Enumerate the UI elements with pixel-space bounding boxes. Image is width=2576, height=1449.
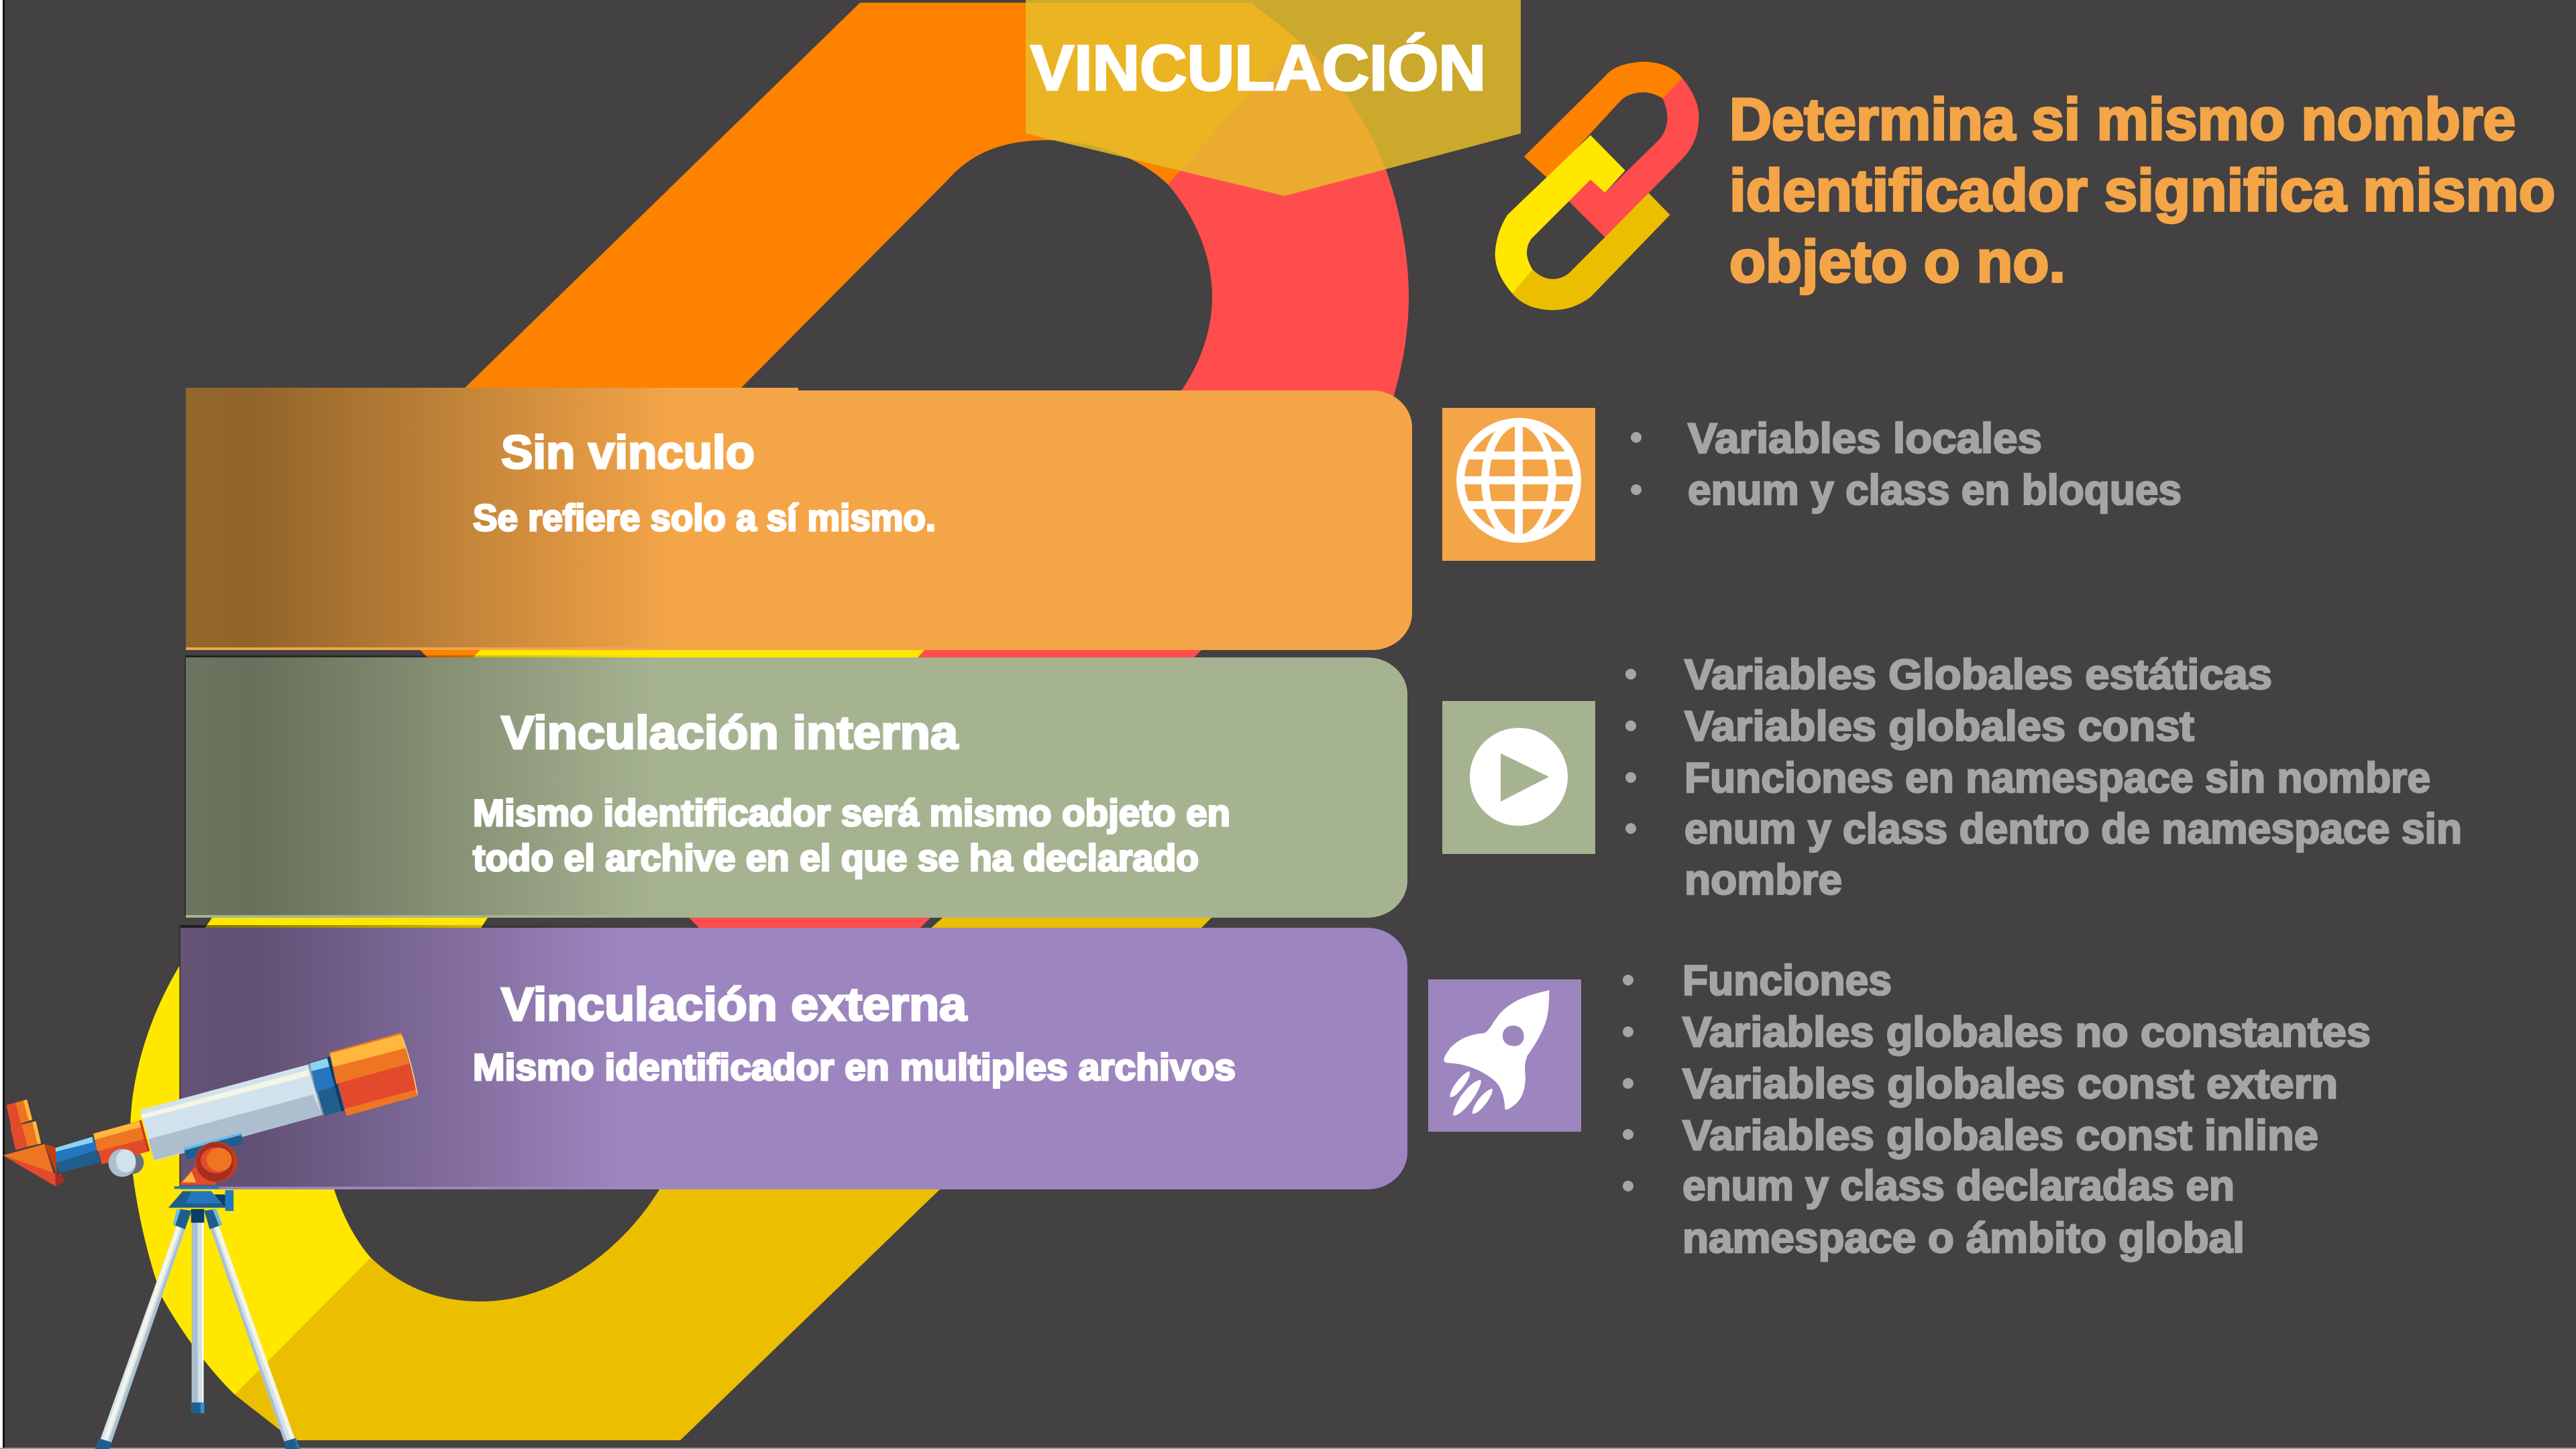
telescope body <box>49 1032 418 1177</box>
telescope mount <box>179 1132 243 1185</box>
icon: globe <box>1442 408 1595 561</box>
list: externa: namespace o ámbito global <box>1682 1215 2245 1262</box>
heading text: objeto o no. <box>1729 228 2065 294</box>
panel body: interna: todo el archive en el que se ha declarado <box>473 837 1199 879</box>
panel heading: sin vinculo: Sin vinculo <box>501 426 755 478</box>
list: interna: enum y class dentro de namespace sin <box>1684 806 2462 853</box>
list: interna: Funciones en namespace sin nombre <box>1684 755 2430 802</box>
panel body: interna: Mismo identificador será mismo objeto en <box>473 792 1230 834</box>
telescope base <box>168 1186 233 1229</box>
list: externa: Variables globales const extern <box>1682 1061 2338 1108</box>
panel heading: externa: Vinculación externa <box>501 978 967 1030</box>
icon: play <box>1442 701 1595 854</box>
illustration: telescope <box>3 1032 418 1449</box>
icon: chain link <box>1495 62 1699 310</box>
list: sin vinculo <box>1631 415 2182 514</box>
icon: rocket <box>1428 979 1581 1132</box>
list: externa <box>1623 957 2371 1262</box>
telescope eyepiece <box>3 1099 64 1186</box>
list: sin vinculo: enum y class en bloques <box>1688 467 2182 514</box>
panel: vinculacion interna <box>185 655 1407 918</box>
panel: vinculacion externa <box>180 925 1407 1189</box>
list: interna <box>1625 651 2462 904</box>
list: externa: enum y class declaradas en <box>1682 1163 2235 1210</box>
telescope legs <box>95 1222 300 1449</box>
list: interna: Variables Globales estáticas <box>1684 651 2272 698</box>
panel: sin vinculo <box>186 388 1412 650</box>
heading text: Determina si mismo nombre <box>1729 86 2516 152</box>
panel body: sin vinculo: Se refiere solo a sí mismo. <box>473 496 936 539</box>
panel heading: interna: Vinculación interna <box>501 706 959 759</box>
panel body: externa: Mismo identificador en multiples archivos <box>473 1046 1236 1088</box>
list: interna: nombre <box>1684 857 1842 904</box>
title banner <box>1026 0 1521 196</box>
list: externa: Variables globales no constantes <box>1682 1009 2371 1056</box>
title text: VINCULACIÓN <box>1030 32 1486 104</box>
list: externa: Funciones <box>1682 957 1892 1004</box>
list: sin vinculo: Variables locales <box>1688 415 2042 462</box>
heading text <box>1729 86 2555 294</box>
list: interna: Variables globales const <box>1684 703 2194 750</box>
list: externa: Variables globales const inline <box>1682 1112 2318 1159</box>
large chain link background <box>130 3 1409 1440</box>
panel body: interna <box>473 792 1230 879</box>
heading text: identificador significa mismo <box>1729 157 2555 223</box>
